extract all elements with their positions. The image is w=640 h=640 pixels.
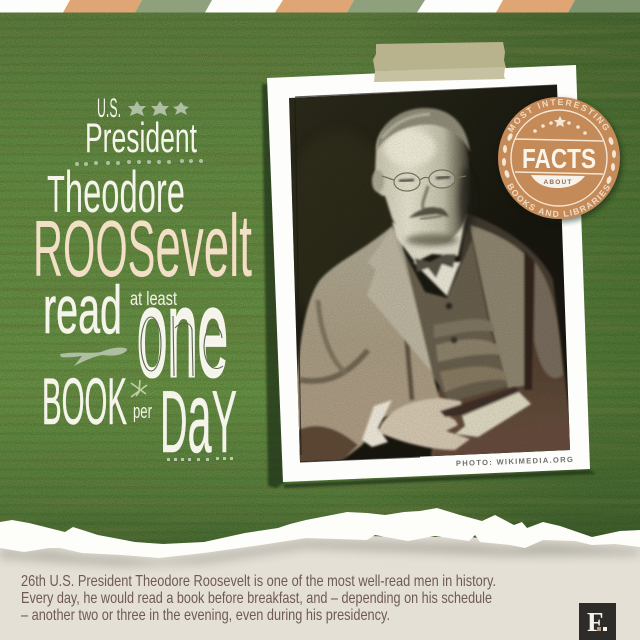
caption: photo credit: PHOTO: WIKIMEDIA.ORG [456, 455, 573, 468]
paper background [0, 534, 640, 640]
buttons [446, 302, 452, 310]
badge side dashes [502, 132, 616, 185]
lower right coat [430, 214, 575, 465]
body text: – another two or three in the evening, even during his presidency. [21, 607, 390, 624]
badge arc text top: MOST INTERESTING [508, 99, 609, 132]
text: Roosevelt: ROOSevelt [33, 196, 252, 295]
text: Day: DaY [160, 362, 237, 474]
glasses [382, 170, 466, 191]
inner lines of one [141, 316, 223, 376]
badge band lines [515, 139, 603, 174]
moustache [409, 207, 449, 218]
heading: main statement [33, 93, 252, 474]
torn white edge [0, 508, 640, 558]
badge arc text bottom: BOOKS AND LIBRARIES [507, 183, 610, 217]
torn paper shadow [0, 540, 640, 566]
heading: main statement: one [137, 265, 228, 403]
left coat and sleeve [297, 226, 440, 462]
icon: three stars [128, 101, 189, 116]
text: per: per [133, 401, 152, 423]
badge word FACTS: FACTS [522, 143, 596, 174]
photo edge shading [295, 85, 557, 462]
text: President: President [85, 114, 197, 161]
head [372, 108, 475, 246]
badge word ABOUT: ABOUT [543, 179, 573, 186]
logo: F [587, 607, 604, 637]
left lapel [367, 228, 432, 372]
badge ribbon about [531, 175, 585, 188]
book [440, 387, 520, 417]
text: Theodore: Theodore [47, 160, 185, 225]
vest [398, 240, 508, 402]
badge: Most interesting facts about books and libraries [498, 96, 625, 226]
logo [579, 603, 616, 640]
icon: ribbon flourish [60, 348, 127, 366]
dotted line under Day [167, 457, 233, 461]
photo shadow [262, 84, 596, 488]
heading: main statement: U.S. [97, 93, 121, 123]
portrait of Theodore Roosevelt [280, 80, 580, 470]
hand [378, 398, 470, 450]
tape strip [373, 42, 506, 82]
shirt and collar [413, 262, 460, 296]
body text: 26th U.S. President Theodore Roosevelt is one of the most well-read men in history. [21, 573, 496, 590]
body text [21, 573, 496, 624]
photo white frame [267, 65, 590, 482]
badge stars [533, 116, 587, 135]
text: read: read [43, 272, 122, 348]
icon: small star sparkle [131, 380, 147, 397]
torn paper footer [0, 508, 640, 640]
body text: Every day, he would read a book before breakfast, and – depending on his schedule [21, 590, 492, 607]
text: at least: at least [130, 289, 178, 310]
bow tie [415, 254, 456, 278]
top airmail stripe [0, 0, 640, 12]
cuff [362, 400, 392, 447]
heading: main statement: BOOK [42, 364, 127, 438]
dotted line under President [75, 159, 203, 166]
panel: taped photograph [267, 65, 590, 482]
